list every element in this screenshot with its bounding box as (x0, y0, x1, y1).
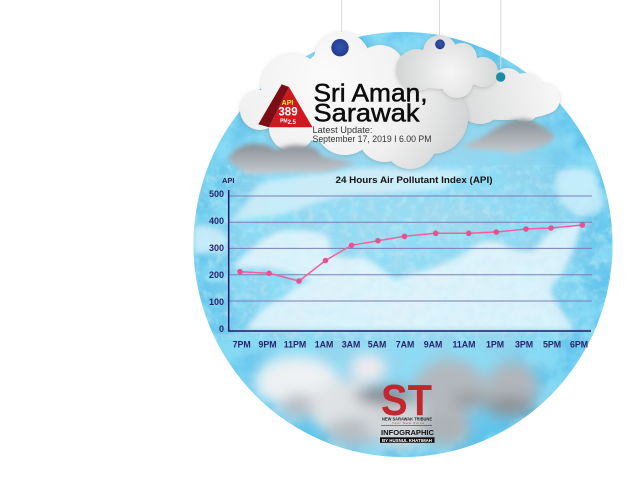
location title (314, 80, 428, 128)
chart title: 24 Hours Air Pollutant Index (API) (336, 175, 492, 186)
location title: Sarawak (314, 100, 420, 128)
x axis labels: 9AM (424, 340, 442, 350)
hanging dots (331, 39, 505, 82)
x axis labels: 7PM (233, 340, 251, 350)
logo: New Sarawak Tribune infographic: ST (381, 376, 432, 425)
x axis labels: 11PM (284, 340, 306, 350)
y axis labels (209, 189, 224, 334)
background sky disc (190, 30, 616, 460)
x axis labels: 3PM (515, 340, 533, 350)
grey rain clouds (228, 119, 555, 174)
line chart (209, 175, 592, 350)
hanging strings (342, 0, 501, 68)
x axis labels: 7AM (396, 340, 414, 350)
y axis labels: 400 (209, 216, 224, 226)
y axis labels: 0 (219, 324, 224, 334)
x axis labels: 9PM (258, 340, 277, 350)
y axis labels: 300 (209, 243, 224, 253)
x axis labels: 5AM (368, 340, 386, 350)
logo: New Sarawak Tribune infographic (380, 376, 435, 443)
x axis labels: 6PM (570, 340, 588, 350)
API badge: 2.5 (288, 120, 297, 126)
data points (237, 222, 585, 284)
API badge (258, 84, 312, 127)
cloud: small centre (396, 35, 498, 98)
latest update (312, 125, 432, 145)
API badge: API (282, 100, 293, 107)
y axis labels: 100 (209, 297, 224, 307)
API badge: 389 (278, 106, 298, 118)
x axis labels: 1AM (315, 340, 333, 350)
x axis labels: 3AM (342, 340, 360, 350)
y axis labels: 500 (209, 189, 224, 199)
logo: New Sarawak Tribune infographic: Your New Voice (392, 421, 424, 425)
logo: New Sarawak Tribune infographic: INFOGRAPHIC (381, 428, 435, 437)
soft clouds along bottom (255, 354, 538, 449)
y axis title: API (222, 176, 235, 185)
x axis labels (233, 340, 588, 350)
logo: New Sarawak Tribune infographic: NEW SARAWAK TRIBUNE (382, 416, 432, 422)
x axis labels: 5PM (543, 340, 561, 350)
cloud: main with location label (240, 32, 468, 169)
latest update: September 17, 2019 I 6.00 PM (312, 134, 432, 145)
x axis labels: 11AM (453, 340, 475, 350)
logo: New Sarawak Tribune infographic: BY HUSNUL KHATIMAH (382, 438, 432, 443)
latest update: Latest Update: (312, 125, 372, 136)
y axis labels: 200 (209, 270, 224, 280)
API badge: PM (280, 118, 288, 124)
x axis labels: 1PM (486, 340, 504, 350)
data line (240, 225, 582, 281)
cloud: right back (453, 68, 560, 124)
location title: Sri Aman, (314, 80, 428, 108)
